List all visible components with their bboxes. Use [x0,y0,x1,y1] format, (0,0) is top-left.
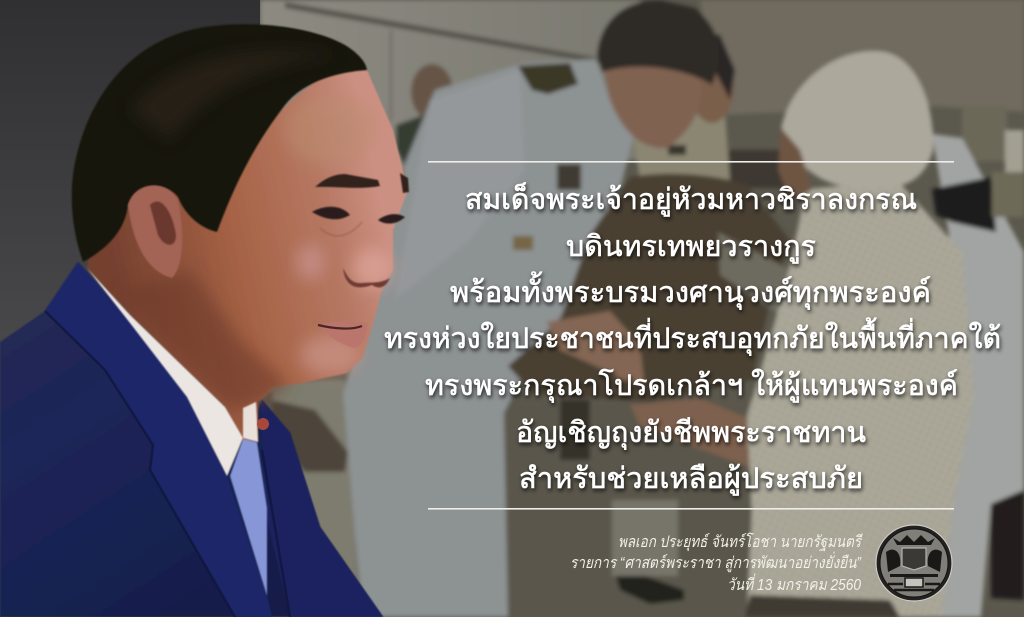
main message text: ทรงห่วงใยประชาชนที่ประสบอุทกภัยในพื้นที่ภาคใต้ [384,317,1001,356]
lapel pin [257,418,269,430]
portrait of speaker [0,24,409,617]
chin tone [300,335,360,375]
neck shadow [120,270,290,407]
inner ear [150,201,176,245]
bald man in background [411,64,453,120]
shirt collar [87,268,243,476]
floor and carpet [272,380,360,617]
attribution text [570,532,863,594]
main message text [384,181,1001,496]
old woman [747,181,974,617]
main message text: บดินทรเทพยวรางกูร [566,231,816,264]
suit jacket [0,262,383,617]
main message text: อัญเชิญถุงยังชีพพระราชทาน [516,417,866,450]
main message text: สำหรับช่วยเหลือผู้ประสบภัย [519,463,863,496]
left dark panel [0,0,260,617]
attribution text: พลเอก ประยุทธ์ จันทร์โอชา นายกรัฐมนตรี [618,532,863,552]
lapel [45,262,272,617]
eye bags [320,222,362,236]
ear [128,185,182,278]
main message text: พร้อมทั้งพระบรมวงศานุวงศ์ทุกพระองค์ [450,271,931,310]
relief bag [508,174,790,402]
forehead tone [285,94,375,166]
ceiling and wall [260,0,640,400]
mouth [318,321,368,348]
person on right [932,134,1024,617]
bottom divider line [428,508,954,510]
main message text: ทรงพระกรุณาโปรดเกล้าฯ ให้ผู้แทนพระองค์ [425,368,958,403]
epaulette [518,63,578,94]
lapel lines [45,311,290,617]
main message text: สมเด็จพระเจ้าอยู่หัวมหาวชิราลงกรณ [465,181,917,217]
hair [72,24,367,262]
nose shadow [343,268,390,287]
hair sheen [130,50,340,140]
eyebrows [315,173,409,193]
lower legs area [505,400,755,617]
necktie [230,439,267,596]
man's head [602,60,701,148]
man in white uniform [343,59,635,617]
eyes [312,207,405,224]
attribution text: รายการ “ศาสตร์พระราชา สู่การพัฒนาอย่างยั่งยืน” [570,551,862,573]
background photo: flood relief scene [260,0,1024,617]
nose highlight [352,248,392,288]
hand [547,311,645,390]
attribution text: วันที่ 13 มกราคม 2560 [727,573,861,594]
neck and face [87,60,408,442]
top divider line [428,161,954,163]
cheek highlight [296,244,324,280]
right lapel [262,400,383,617]
icon: government seal [876,525,952,601]
shoe [616,574,684,604]
right collar [243,402,258,442]
second man [630,112,730,180]
